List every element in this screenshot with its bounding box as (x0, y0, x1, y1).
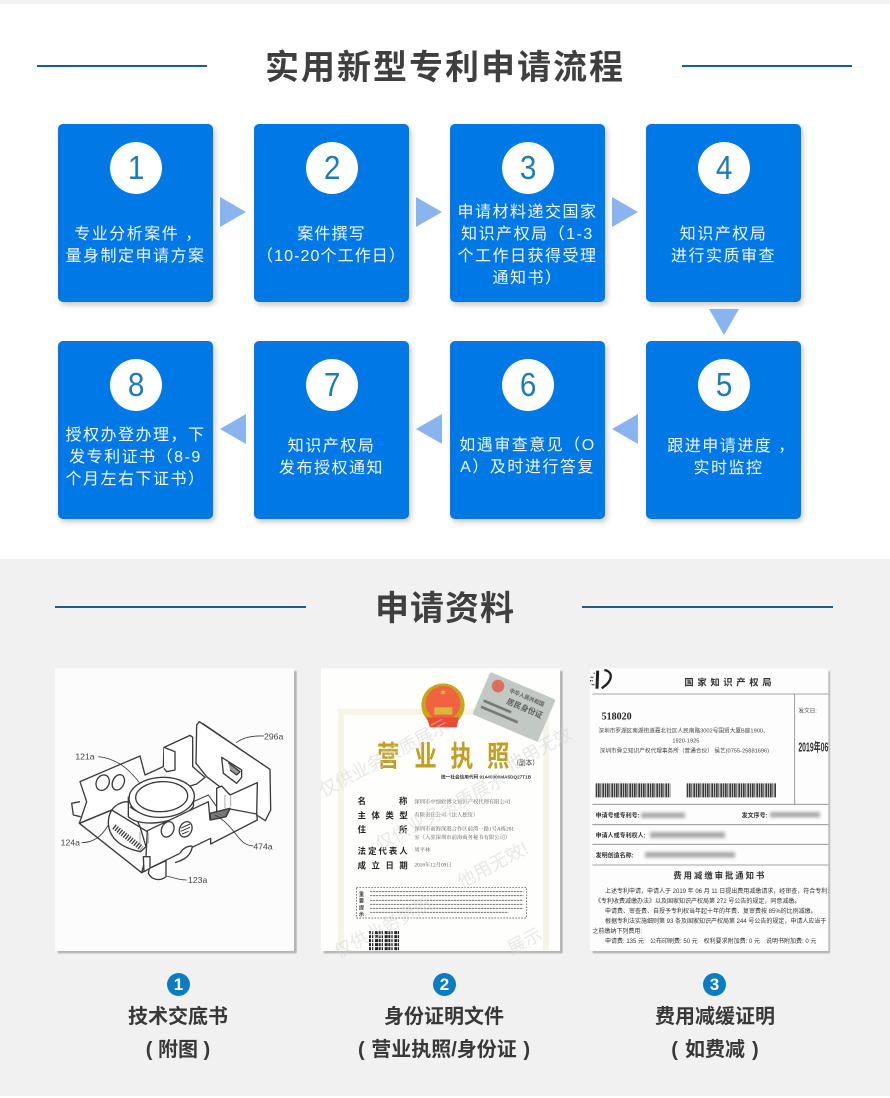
document: business license and ID card: 名 (358, 796, 366, 806)
ID card: 居民身份证 (505, 696, 545, 720)
step card 5: 跟进申请进度 ， (667, 438, 796, 455)
step card 3: 个工作日获得受理 (457, 248, 598, 265)
step card 6: 如遇审查意见（O (459, 437, 596, 454)
license title: 执 (450, 741, 473, 773)
arrow: step 1 to 2 (220, 197, 246, 227)
document: business license and ID card: 深圳市中细软博文知识产权代理有限公司 (414, 797, 510, 805)
item 1: number and caption: ( 附图 ) (146, 1039, 210, 1061)
step card 3: 知识产权局（1-3 (461, 226, 594, 243)
step card 2: 2 (324, 149, 340, 186)
arrow: step 2 to 3 (416, 197, 442, 227)
divider lines (592, 694, 828, 865)
step card 8: 个月左右下证书） (65, 471, 206, 488)
shaft (148, 861, 166, 880)
step card 2: （10-20个工作日） (257, 248, 406, 265)
step card 6 (450, 341, 605, 519)
document: business license and ID card: 提 (359, 904, 364, 911)
step card 6: A）及时进行答复 (460, 459, 595, 476)
item 1: number and caption: 1 (174, 975, 183, 994)
back plate (196, 722, 271, 821)
step card 8: 8 (128, 366, 144, 403)
step card 3: 通知书） (492, 270, 562, 287)
QR code (369, 931, 399, 951)
document: fee reduction notice: 发文序号: (742, 811, 768, 819)
document: fee reduction notice: 《专利收费减缴办法》以及国家知识产权局第 272 号公告的规定，同意减缴。 (595, 897, 800, 905)
document: fee reduction notice: 申请人或专利权人: (596, 831, 646, 839)
item 3: number and caption: 3 (710, 975, 719, 994)
step card 8: 授权办登办理，下 (65, 427, 206, 444)
watermark: 仅供业务资质 (331, 894, 436, 960)
item 1: number and caption: 技术交底书 (128, 1006, 228, 1028)
step card 1 (58, 124, 213, 302)
step card 1: 量身制定申请方案 (65, 248, 206, 265)
step card 7: 发布授权通知 (279, 460, 384, 477)
document: patent drawing (55, 668, 298, 954)
step card 3: 申请材料递交国家 (457, 204, 598, 221)
arrow: step 5 to 6 (612, 414, 638, 444)
step card 1: 专业分析案件 ， (74, 226, 203, 243)
watermark: 仅供业务资质展示 (372, 769, 509, 854)
step card 7: 7 (324, 366, 340, 403)
blurred redactions (641, 812, 820, 858)
title: 实用新型专利申请流程: 实用新型专利申请流程 (265, 49, 625, 87)
document: fee reduction notice: 发明创造名称: (596, 851, 634, 859)
arrow: step 3 to 4 (612, 197, 638, 227)
document: business license and ID card: 住 (358, 825, 367, 835)
step card 4: 4 (716, 149, 732, 186)
watermark: 展示 (504, 924, 545, 959)
step card 3: 3 (520, 149, 536, 186)
item 2: number and caption: ( 营业执照/身份证 ) (358, 1039, 530, 1061)
arrow: step 4 to 5 (709, 309, 739, 335)
document: fee reduction notice: 申请费: 135 元 公布印刷费: 50 元 权利要求附加费: 0 元 说明书附加费: 0 元 (605, 937, 816, 945)
document: fee reduction notice: 根据专利法实施细则第 93 条及国家知识产权局第 244 号公告的规定，申请人应当于 20 (605, 917, 835, 925)
document: business license and ID card: 深圳市前海深港合作区前湾一路1号A栋201 (414, 825, 514, 833)
document: business license and ID card: 室（入驻深圳市前海商务秘书有限公司） (414, 833, 510, 841)
step card 1: 1 (128, 149, 144, 186)
ID card: 中华人民共和国 (508, 686, 546, 708)
step card 5 (646, 341, 801, 519)
document: patent drawing: 121a (75, 751, 95, 761)
step card 4 (646, 124, 801, 302)
document: business license and ID card (316, 668, 575, 960)
watermark (316, 716, 575, 962)
document: business license and ID card: 2016年12月09日 (414, 861, 452, 869)
watermark: 他用无效! (454, 838, 532, 892)
watermark: 他用无效 (502, 724, 575, 775)
leader lines (82, 736, 264, 880)
barcodes (596, 769, 777, 811)
item 1: number and caption (128, 973, 228, 1061)
notice box (356, 887, 526, 918)
item 2: number and caption: 身份证明文件 (384, 1006, 504, 1028)
document: business license and ID card: 主体类型 (358, 810, 408, 820)
item 3: number and caption (655, 973, 775, 1061)
step card 4: 进行实质审查 (671, 248, 776, 265)
step card 7 (254, 341, 409, 519)
document: fee reduction notice: 深圳市舜立知识产权代理事务所（普通合伙） 侯艺(0755-25881696) (600, 747, 769, 755)
document: business license and ID card: 示 (359, 912, 364, 918)
certificate border (341, 712, 546, 950)
license title (377, 740, 509, 773)
document: business license and ID card: 称 (399, 796, 408, 806)
step card 5: 实时监控 (693, 460, 764, 477)
document: fee reduction notice: 发文日: (798, 706, 817, 714)
watermark: 仅供业务资质展示 (316, 716, 452, 801)
document: fee reduction notice: 国家知识产权局 (684, 677, 775, 688)
step card 7: 知识产权局 (288, 438, 375, 455)
heading: 申请资料: 申请资料 (375, 590, 515, 628)
arrow: step 7 to 8 (220, 414, 246, 444)
national emblem (421, 683, 465, 727)
item 3: number and caption: 费用减缓证明 (655, 1006, 775, 1028)
office logo (590, 670, 611, 689)
step card 2: 案件撰写 (297, 226, 366, 243)
document: fee reduction notice: 申请号或专利号: (596, 811, 640, 819)
document: fee reduction notice: 之前缴纳下列费用: (592, 927, 642, 935)
ID card (472, 672, 556, 742)
document: patent drawing: 124a (61, 838, 80, 848)
document: fee reduction notice: 申请费、审查费、自授予专利权当年起十年的年费、复审费按 85%的比例减缴。 (605, 907, 817, 915)
document: business license and ID card: 所 (399, 825, 408, 835)
document: fee reduction notice: 1920-1925 (672, 738, 699, 744)
item 3: number and caption: ( 如费减 ) (671, 1039, 759, 1061)
document: business license and ID card: 有限责任公司（法人独资） (414, 811, 478, 819)
item 2: number and caption: 2 (440, 975, 449, 994)
document: business license and ID card: （副本） (512, 758, 539, 767)
document: fee reduction notice (590, 668, 830, 954)
step card 6: 6 (520, 366, 536, 403)
document: business license and ID card: 周平林 (414, 846, 431, 854)
item 2: number and caption (358, 973, 530, 1061)
document: business license and ID card: 法定代表人 (358, 846, 408, 856)
document: business license and ID card: 成立日期 (358, 860, 408, 870)
document: business license and ID card: 要 (359, 898, 364, 905)
step card 5: 5 (716, 366, 732, 403)
document: patent drawing: 123a (188, 875, 207, 885)
gear and lens (108, 802, 146, 852)
step card 4: 知识产权局 (680, 226, 767, 243)
document: fee reduction notice: 深圳市罗湖区南湖街道嘉北社区人民南路3002号国贸大厦B座1900、 (598, 726, 769, 734)
document: patent drawing: 296a (264, 731, 283, 741)
document: fee reduction notice: 518020 (602, 711, 632, 722)
step card 3 (450, 124, 605, 302)
front wall (79, 810, 147, 873)
arrow: step 6 to 7 (416, 414, 442, 444)
side rail (208, 783, 257, 827)
step card 8: 发专利证书（8-9 (69, 449, 202, 466)
rear wall (79, 735, 205, 823)
document: fee reduction notice: 上述专利申请，申请人于 2019 年 06 月 11 日提出费用减缴请求，经审查，符合专利法实 (605, 887, 835, 895)
license title: 照 (487, 741, 509, 773)
document: patent drawing: 474a (253, 841, 273, 851)
license title: 营 (377, 740, 399, 773)
step card 2 (254, 124, 409, 302)
document: fee reduction notice: 费用减缴审批通知书 (673, 870, 766, 880)
document: business license and ID card: 重 (359, 891, 364, 898)
step card 8 (58, 341, 213, 519)
license title: 业 (414, 740, 437, 773)
document: business license and ID card: 统一社会信用代码 91440300MA5DQ27T1B (441, 774, 532, 781)
